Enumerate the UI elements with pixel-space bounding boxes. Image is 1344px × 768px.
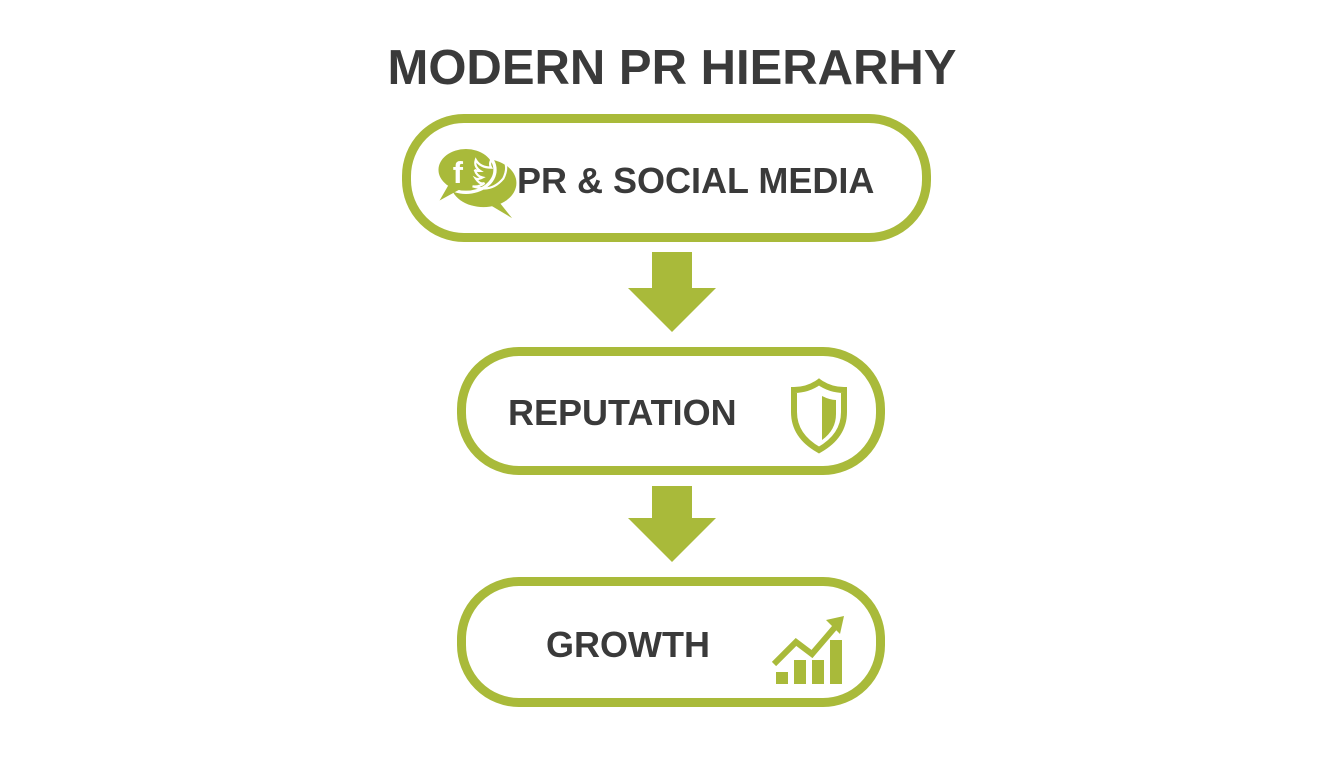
arrow 2: [628, 486, 716, 562]
icon: social chat bubbles: f: [453, 155, 464, 190]
label: GROWTH: [546, 624, 710, 665]
icon: social chat bubbles: [438, 149, 516, 218]
arrow 1: [628, 252, 716, 332]
panel: reputation: [457, 347, 885, 475]
panel: growth: [457, 577, 885, 707]
title: MODERN PR HIERARHY: [388, 41, 956, 95]
label: REPUTATION: [508, 392, 737, 433]
icon: shield: [791, 378, 847, 454]
label: PR & SOCIAL MEDIA: [517, 160, 874, 201]
icon: growth chart: [772, 616, 844, 684]
panel: PR & social media: [402, 114, 931, 242]
